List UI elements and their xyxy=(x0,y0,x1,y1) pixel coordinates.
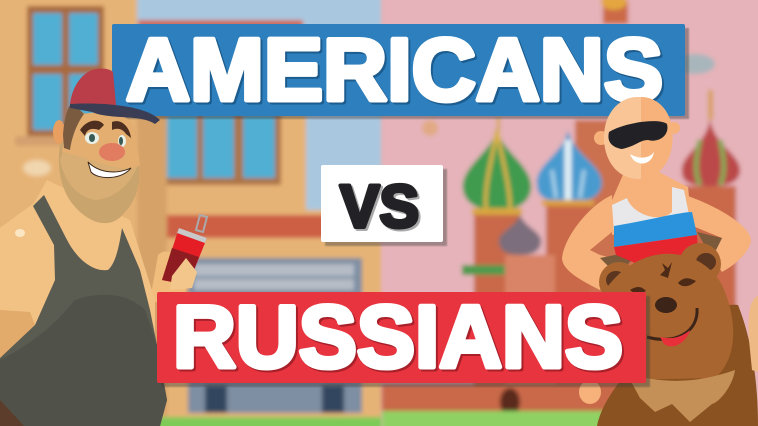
title: AMERICANS: AMERICANS xyxy=(126,20,663,119)
Russian's bald head xyxy=(594,97,680,179)
man's eyes xyxy=(85,132,126,147)
man's red cap xyxy=(70,69,160,124)
Russian man character xyxy=(562,97,751,290)
man's ear xyxy=(53,120,65,144)
vs text shadow: VS xyxy=(342,175,421,242)
title: RUSSIANS: RUSSIANS xyxy=(173,287,623,386)
background: Red Square cathedral xyxy=(382,0,758,426)
man's chin shade xyxy=(60,120,138,200)
man's belt xyxy=(0,400,24,426)
title text shadow: RUSSIANS xyxy=(175,289,625,388)
blue AMERICANS banner xyxy=(112,20,689,121)
Russian's smile xyxy=(630,152,654,164)
American man character xyxy=(0,69,207,426)
banner panel xyxy=(112,24,685,116)
banner panel xyxy=(157,292,646,383)
bear's dark body xyxy=(597,305,758,426)
Russian's arms xyxy=(562,195,751,290)
Russian's black sunglasses xyxy=(608,121,667,149)
banner shadow xyxy=(116,28,689,119)
man's arm shade xyxy=(0,310,35,358)
man's head xyxy=(53,102,140,223)
Russian's neck and chest xyxy=(612,170,692,235)
man's brows xyxy=(80,121,131,138)
man's skin: shoulders and neck xyxy=(0,180,155,400)
bear's face xyxy=(630,262,697,346)
Russian's hand on left xyxy=(579,380,601,404)
shadow gap behind arms xyxy=(600,232,722,276)
Russian's flag tank top xyxy=(612,187,698,265)
man's tank top xyxy=(0,195,167,426)
bear's head xyxy=(605,254,733,380)
bear's pale mane xyxy=(627,370,735,422)
man's belly xyxy=(0,295,167,426)
banner shadow xyxy=(161,296,650,387)
man's arm highlight xyxy=(15,229,25,237)
vs text: VS xyxy=(340,173,419,240)
box panel xyxy=(321,165,443,242)
skin at right edge xyxy=(749,296,758,372)
red RUSSIANS banner xyxy=(157,287,650,388)
box shadow xyxy=(325,169,447,246)
man's grin xyxy=(88,162,131,178)
bear's ears xyxy=(599,243,721,302)
background: American street scene xyxy=(0,0,382,426)
man's hair xyxy=(63,102,84,150)
title text shadow: AMERICANS xyxy=(128,22,665,121)
man's jowl xyxy=(59,110,139,223)
white vs box xyxy=(321,165,447,246)
bear xyxy=(579,243,758,426)
man's nose xyxy=(99,143,125,161)
man's upper face xyxy=(62,112,140,168)
man's hand holding can xyxy=(150,215,207,305)
